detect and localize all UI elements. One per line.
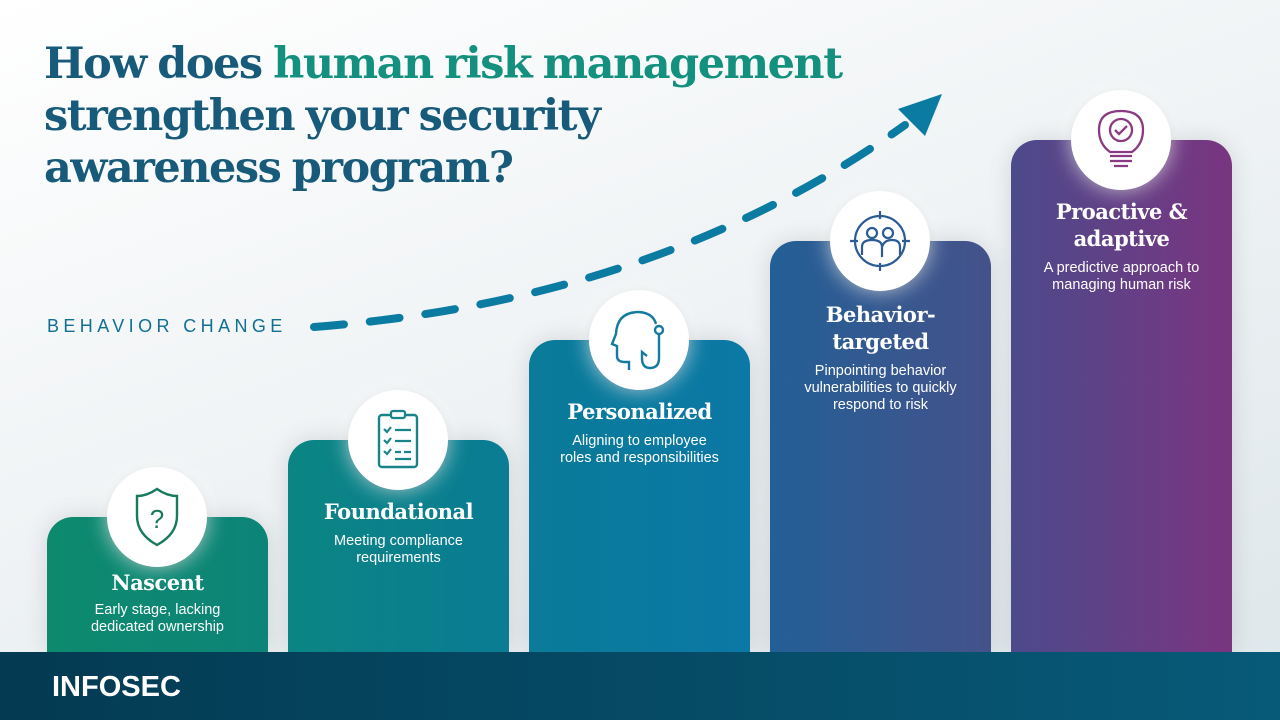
panel: personalized: roles and responsibilities [560, 450, 719, 466]
icon: head hook [589, 290, 689, 390]
panel: proactive & adaptive: adaptive [1074, 226, 1169, 251]
panel: proactive & adaptive: A predictive approach to managing human risk [1044, 260, 1199, 293]
title: awareness program? [44, 143, 512, 193]
panel: personalized: Aligning to employee [572, 433, 707, 449]
panel: foundational [288, 440, 509, 652]
panel: proactive & adaptive [1011, 140, 1232, 652]
title: strengthen your security [44, 91, 600, 141]
panel: personalized [529, 340, 750, 652]
panel: behavior-targeted: Behavior- [826, 302, 935, 327]
panel: personalized: Personalized [567, 399, 712, 424]
logo: infosec: INFOSEC [52, 671, 181, 703]
icon: clipboard [348, 390, 448, 490]
icon: target people [830, 191, 930, 291]
panel: nascent [47, 517, 268, 652]
panel: foundational: Foundational [324, 499, 473, 524]
panel: behavior-targeted: targeted [832, 329, 929, 354]
panel: nascent: Early stage, lacking dedicated ownership [91, 602, 224, 635]
icon: shield question: ? [150, 504, 164, 534]
panel: behavior-targeted: Pinpointing behavior vulnerabilities to quickly respond to risk [804, 363, 957, 413]
title [44, 39, 843, 193]
footer [0, 652, 1280, 720]
panel: proactive & adaptive: Proactive & [1056, 199, 1187, 224]
icon: lightbulb check [1071, 90, 1171, 190]
panel: behavior-targeted [770, 241, 991, 652]
title: How does human risk management [44, 39, 842, 89]
icon: shield question [107, 467, 207, 567]
label: behavior change: BEHAVIOR CHANGE [47, 316, 287, 336]
panel: foundational: Meeting compliance requirements [334, 533, 463, 566]
panel: nascent: Nascent [111, 570, 204, 595]
